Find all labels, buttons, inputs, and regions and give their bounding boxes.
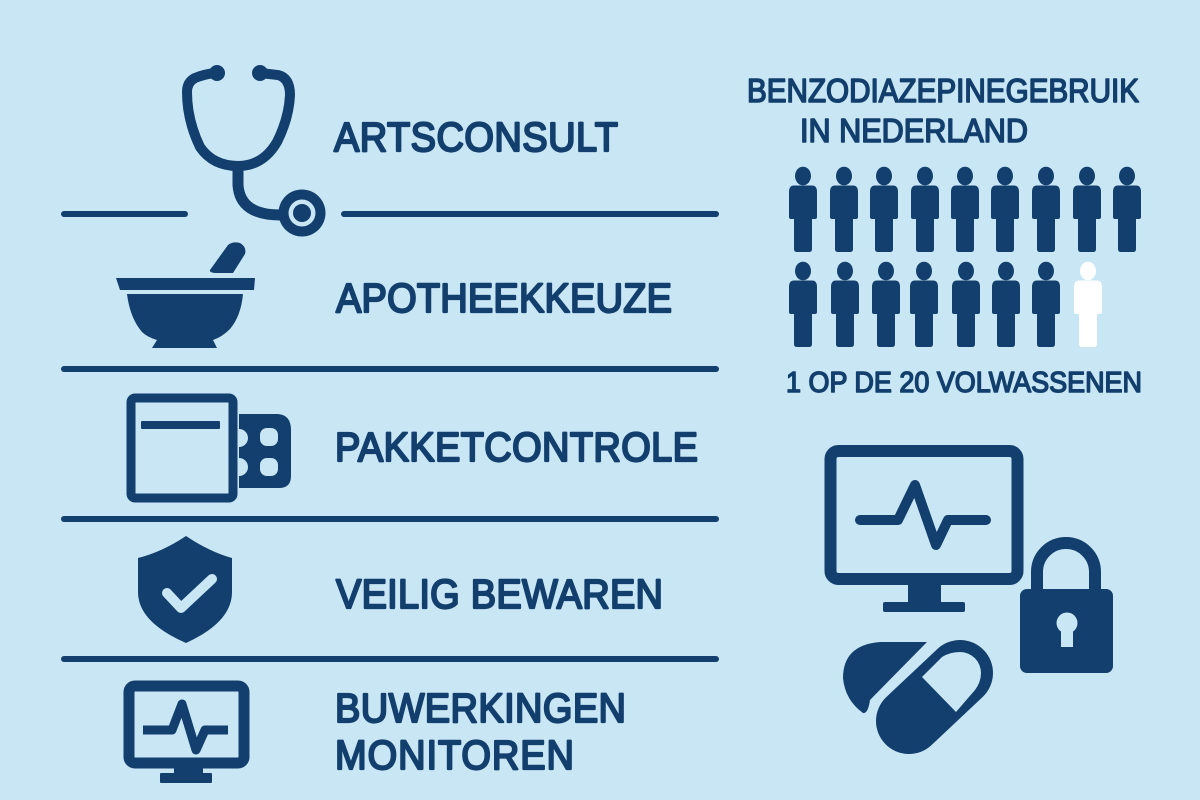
heading: Artsconsult: ARTSCONSULT <box>334 115 618 160</box>
panel title: BENZODIAZEPINEGEBRUIK <box>747 72 1139 109</box>
icon: stethoscope <box>187 65 326 236</box>
panel title: IN NEDERLAND <box>800 112 1028 149</box>
heading: Pakketcontrole: PAKKETCONTROLE <box>335 425 698 470</box>
icon: padlock <box>1020 543 1113 673</box>
icon: large monitor <box>830 451 1018 612</box>
heading: Bijwerkingen monitoren <box>335 686 626 778</box>
pictogram: people <box>789 167 1141 347</box>
panel title <box>747 72 1139 149</box>
caption: 1 OP DE 20 VOLWASSENEN <box>786 367 1142 399</box>
icon: package and blister <box>131 398 291 498</box>
heading: Veilig bewaren: VEILIG BEWAREN <box>336 572 663 617</box>
icon: shield with check <box>138 536 232 643</box>
heading: Apotheekkeuze: APOTHEEKKEUZE <box>336 276 672 321</box>
icon: small monitor <box>129 686 244 783</box>
heading: Bijwerkingen monitoren: MONITOREN <box>335 733 574 778</box>
heading: Bijwerkingen monitoren: BUWERKINGEN <box>335 686 626 731</box>
icon: capsule <box>843 642 981 721</box>
icon: mortar and pestle <box>116 242 255 348</box>
